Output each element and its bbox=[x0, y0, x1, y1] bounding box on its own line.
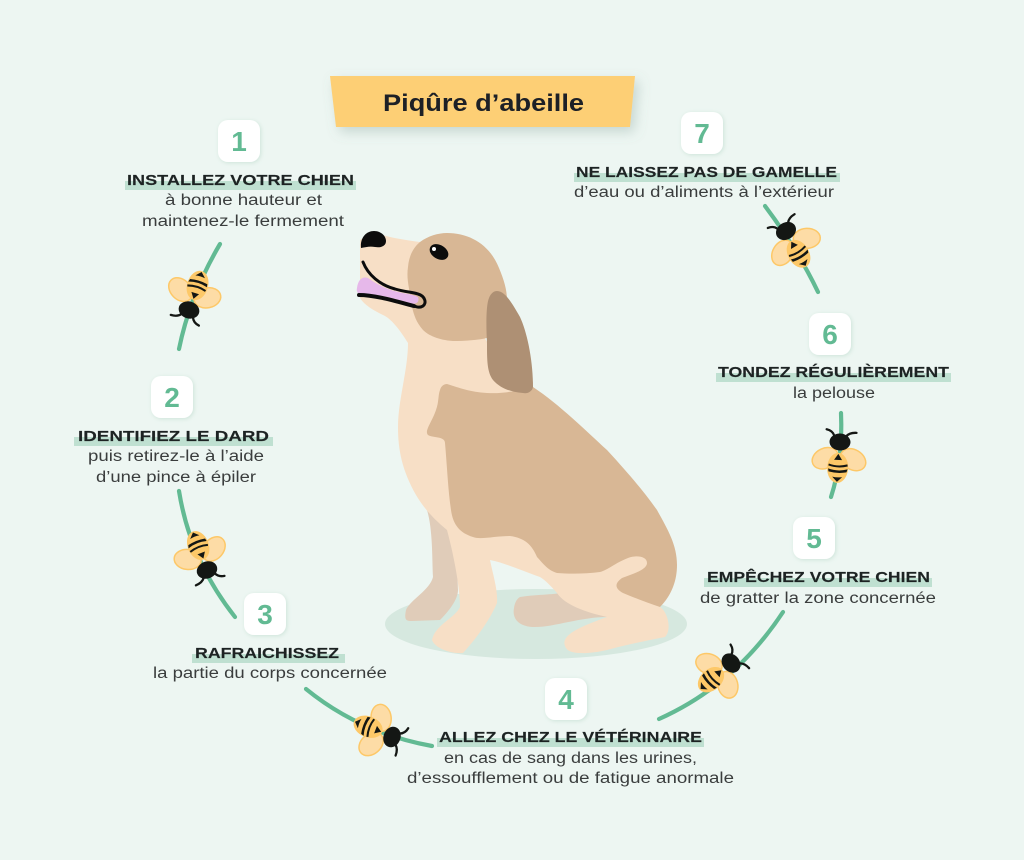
step 5 bbox=[700, 517, 936, 607]
text 4: en cas de sang dans les urines, bbox=[444, 750, 697, 767]
text 2: puis retirez-le à l’aide bbox=[88, 448, 264, 465]
text 1: maintenez-le fermement bbox=[142, 213, 345, 230]
badge 6: 6 bbox=[822, 319, 838, 350]
title banner bbox=[330, 76, 635, 127]
step 7 bbox=[574, 112, 840, 201]
nose bbox=[361, 231, 386, 248]
ground shadow bbox=[385, 589, 687, 659]
dog body base bbox=[360, 232, 669, 653]
step 2 bbox=[74, 376, 273, 486]
eye bbox=[427, 241, 451, 263]
badge 4: 4 bbox=[558, 684, 574, 715]
title banner: Piqûre d’abeille bbox=[383, 90, 584, 117]
step 3 bbox=[153, 593, 387, 682]
text 2: d’une pince à épiler bbox=[96, 469, 256, 486]
text 5: de gratter la zone concernée bbox=[700, 590, 936, 607]
text 3: la partie du corps concernée bbox=[153, 665, 387, 682]
text 4: d’essoufflement ou de fatigue anormale bbox=[407, 770, 734, 787]
arrow with bee: 1 to 2 bbox=[156, 244, 230, 349]
arrow with bee: 5 to 6 bbox=[807, 413, 871, 497]
body patch bbox=[427, 384, 677, 607]
step 1 bbox=[125, 120, 356, 230]
badge 6 bbox=[809, 313, 851, 355]
ear bbox=[486, 291, 533, 393]
badge 4 bbox=[545, 678, 587, 720]
badge 3: 3 bbox=[257, 599, 273, 630]
arrow with bee: 3 to 4 bbox=[306, 689, 432, 770]
arrow with bee: 2 to 3 bbox=[163, 491, 240, 617]
badge 7: 7 bbox=[694, 118, 710, 149]
step 4 bbox=[407, 678, 734, 787]
mouth bbox=[359, 262, 425, 307]
heading 5: EMPÊCHEZ VOTRE CHIEN bbox=[707, 568, 930, 586]
badge 7 bbox=[681, 112, 723, 154]
text 1: à bonne hauteur et bbox=[165, 192, 323, 209]
text 7: d’eau ou d’aliments à l’extérieur bbox=[574, 184, 834, 201]
text 4 bbox=[407, 750, 734, 787]
badge 2 bbox=[151, 376, 193, 418]
arrow with bee: 6 to 7 bbox=[754, 205, 833, 292]
heading 2: IDENTIFIEZ LE DARD bbox=[78, 428, 269, 445]
heading 3: RAFRAICHISSEZ bbox=[195, 645, 339, 662]
arrow with bee: 4 to 5 bbox=[659, 612, 783, 719]
text 2 bbox=[88, 448, 264, 486]
badge 1 bbox=[218, 120, 260, 162]
heading 1: INSTALLEZ VOTRE CHIEN bbox=[127, 172, 354, 189]
far legs bbox=[405, 510, 608, 627]
heading 7: NE LAISSEZ PAS DE GAMELLE bbox=[576, 164, 837, 181]
badge 5: 5 bbox=[806, 523, 822, 554]
tongue bbox=[357, 277, 419, 304]
text 1 bbox=[142, 192, 345, 230]
badge 1: 1 bbox=[231, 126, 247, 157]
dog illustration bbox=[357, 231, 687, 659]
heading 6: TONDEZ RÉGULIÈREMENT bbox=[718, 364, 949, 381]
text 6: la pelouse bbox=[793, 385, 875, 402]
badge 3 bbox=[244, 593, 286, 635]
step 6 bbox=[716, 313, 951, 402]
badge 2: 2 bbox=[164, 382, 180, 413]
badge 5 bbox=[793, 517, 835, 559]
heading 4: ALLEZ CHEZ LE VÉTÉRINAIRE bbox=[439, 729, 702, 746]
head patch bbox=[407, 233, 507, 341]
